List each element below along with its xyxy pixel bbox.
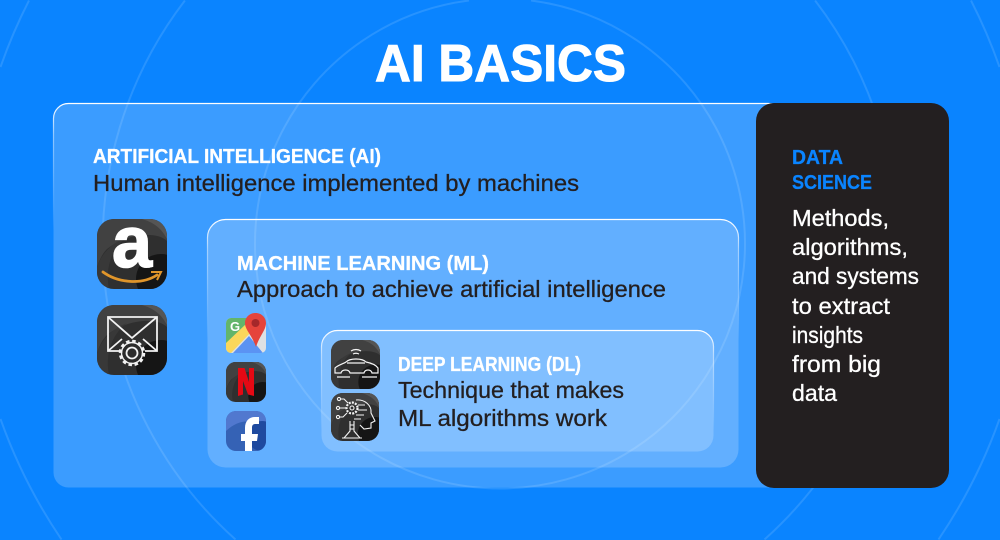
icon: google maps bbox=[226, 313, 266, 353]
heading: machine learning: MACHINE LEARNING (ML) bbox=[237, 253, 489, 275]
icon: netflix bbox=[226, 362, 277, 411]
icon: google maps: G bbox=[230, 319, 240, 334]
text: data science definition: Methods, bbox=[792, 205, 889, 231]
heading: artificial intelligence: ARTIFICIAL INTELLIGENCE (AI) bbox=[93, 146, 381, 168]
heading: data science bbox=[792, 147, 872, 194]
heading: data science: DATA bbox=[792, 147, 843, 169]
icon: AI head bbox=[331, 393, 392, 451]
text: data science definition bbox=[792, 205, 919, 406]
panel: deep learning bbox=[322, 330, 714, 452]
heading: data science: SCIENCE bbox=[792, 172, 872, 194]
text: AI definition: Human intelligence implemented by machines bbox=[93, 170, 579, 196]
icon: self-driving car bbox=[331, 340, 393, 400]
text: data science definition: algorithms, bbox=[792, 234, 908, 260]
icon: amazon bbox=[97, 203, 186, 304]
panel: artificial intelligence bbox=[54, 104, 784, 488]
icon: email settings bbox=[97, 305, 186, 390]
text: data science definition: from big bbox=[792, 351, 881, 377]
text: DL definition: Technique that makes bbox=[398, 377, 624, 403]
title: AI BASICS bbox=[375, 35, 626, 93]
icon: facebook bbox=[226, 411, 266, 451]
text: data science definition: insights bbox=[792, 322, 863, 348]
text: data science definition: to extract bbox=[792, 293, 891, 319]
panel: data science bbox=[756, 103, 949, 488]
heading: deep learning: DEEP LEARNING (DL) bbox=[398, 354, 581, 376]
text: ML definition: Approach to achieve artificial intelligence bbox=[237, 276, 666, 302]
panel: machine learning bbox=[208, 220, 738, 468]
text: data science definition: and systems bbox=[792, 263, 919, 289]
icon: amazon: a bbox=[112, 203, 153, 283]
text: DL definition: ML algorithms work bbox=[398, 405, 608, 431]
text: DL definition bbox=[398, 377, 624, 431]
text: data science definition: data bbox=[792, 380, 837, 406]
